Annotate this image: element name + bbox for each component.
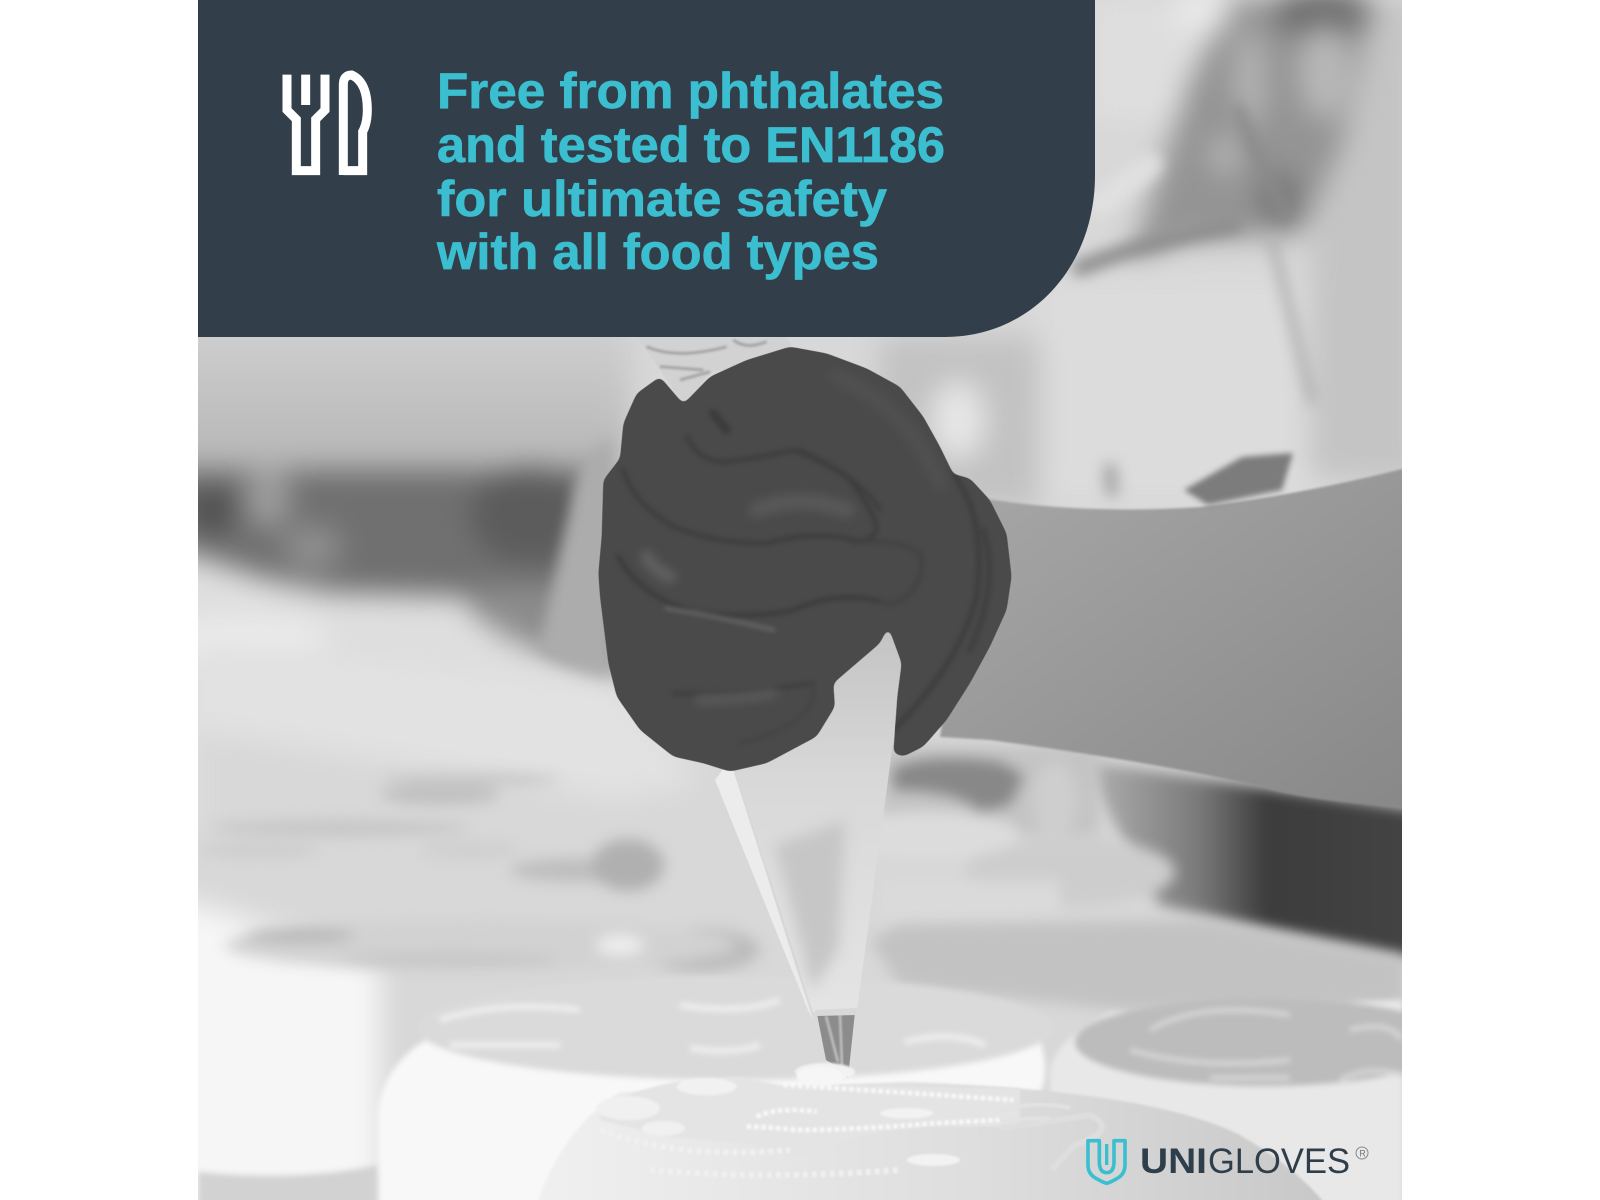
piping bag top	[645, 338, 768, 383]
background gap under chin	[1184, 453, 1293, 505]
heading: food safety statement: and tested to EN1186	[437, 117, 945, 173]
front cake with icing detail	[535, 1063, 1330, 1200]
logo: Unigloves	[1088, 1141, 1368, 1183]
piping bag cone	[715, 620, 903, 1078]
central cake	[378, 1035, 1045, 1200]
panel: dark headline banner	[198, 0, 1095, 337]
shadow under the arm	[1080, 760, 1420, 960]
icon: fork and knife	[287, 75, 367, 175]
heading: food safety statement: with all food types	[436, 224, 879, 280]
heading: food safety statement: Free from phthalates	[437, 63, 944, 119]
logo: Unigloves: UNI	[1140, 1142, 1207, 1181]
black nitrile glove	[598, 347, 1012, 772]
logo: Unigloves: R	[1359, 1148, 1366, 1158]
heading: food safety statement: for ultimate safety	[437, 171, 887, 227]
forearm	[940, 467, 1410, 808]
icing band far right	[1050, 1000, 1402, 1200]
heading: food safety statement	[436, 63, 945, 280]
logo: Unigloves: GLOVES	[1208, 1142, 1350, 1181]
